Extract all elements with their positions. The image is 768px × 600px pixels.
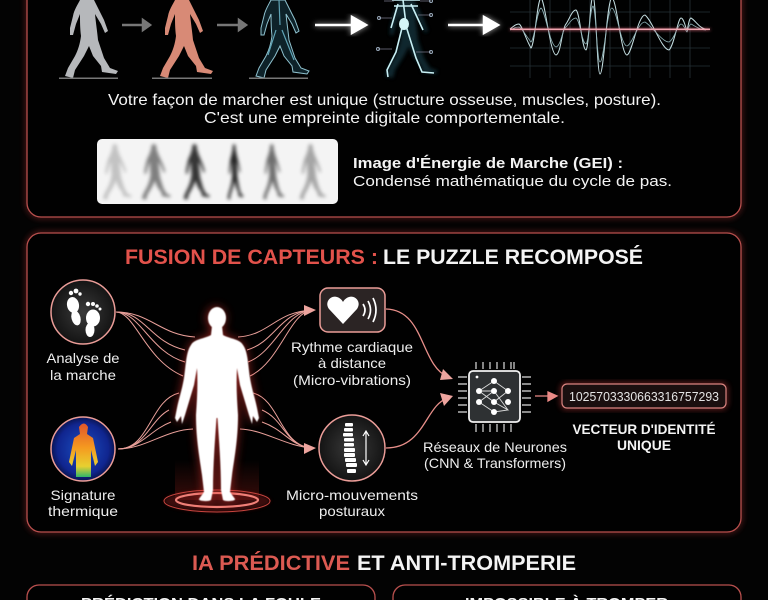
panel: crowd prediction <box>27 585 375 600</box>
label: thermal signature: thermique <box>48 503 118 519</box>
text: gait description <box>108 92 661 127</box>
text: gait description: Votre façon de marcher est unique (structure osseuse, muscles, posture). <box>108 92 661 109</box>
heading: predictive AI <box>192 552 576 575</box>
chart: gait waveform <box>510 0 710 78</box>
text: GEI caption: Condensé mathématique du cycle de pas. <box>353 173 672 190</box>
connectors: sensors to body <box>116 310 312 449</box>
connector: spine sensor to neural network <box>386 393 453 448</box>
icon: glowing human body on scanner <box>164 307 270 512</box>
identity vector box <box>562 384 726 408</box>
label: unique identity vector <box>572 421 716 453</box>
heading: predictive AI: IA PRÉDICTIVE <box>192 552 350 575</box>
label: remote heart rate: à distance <box>318 355 386 371</box>
heading: sensor fusion: FUSION DE CAPTEURS : <box>125 246 378 269</box>
icon: neural network chip <box>458 362 531 432</box>
icon: muscle walking figure <box>152 0 213 79</box>
label: remote heart rate: (Micro-vibrations) <box>293 372 411 388</box>
label: postural micro-movements: Micro-mouvements <box>286 487 418 503</box>
arrow: into heart sensor <box>304 305 316 316</box>
icon: spine micro-movements <box>319 415 385 481</box>
label: unique identity vector: VECTEUR D'IDENTITÉ <box>572 421 716 437</box>
label: postural micro-movements: posturaux <box>319 503 385 519</box>
heading: sensor fusion: LE PUZZLE RECOMPOSÉ <box>383 246 643 269</box>
panel: impossible to deceive <box>393 585 741 600</box>
label: remote heart rate <box>291 339 413 388</box>
heading: predictive AI: ET ANTI-TROMPERIE <box>357 552 576 575</box>
arrow: grey step 2 <box>217 20 246 30</box>
panel: sensor fusion <box>27 233 741 532</box>
icon: skeleton walking figure <box>376 0 438 78</box>
arrow: white glowing step 3 <box>315 17 366 33</box>
label: thermal signature: Signature <box>50 487 116 503</box>
label: unique identity vector: UNIQUE <box>617 437 671 453</box>
connector: heart sensor to neural network <box>386 309 453 380</box>
label: remote heart rate: Rythme cardiaque <box>291 339 413 355</box>
text: GEI caption: Image d'Énergie de Marche (GEI) : <box>353 155 623 172</box>
arrow: grey step 1 <box>122 20 150 30</box>
arrow: network to vector <box>535 392 557 401</box>
heading: sensor fusion <box>125 246 643 269</box>
label: gait analysis: la marche <box>50 367 116 383</box>
icon: thermal signature <box>51 417 115 481</box>
icon: footprints <box>51 280 115 344</box>
icon: grey walking figure <box>59 0 118 79</box>
label: postural micro-movements <box>286 487 418 519</box>
label: neural networks <box>423 439 567 471</box>
label: neural networks: (CNN & Transformers) <box>424 455 566 471</box>
label: neural networks: Réseaux de Neurones <box>423 439 567 455</box>
identity vector box: 1025703330663316757293 <box>569 389 719 404</box>
label: gait analysis <box>46 350 120 383</box>
icon: vascular walking figure <box>249 0 309 79</box>
label: thermal signature <box>48 487 118 519</box>
label: gait analysis: Analyse de <box>46 350 120 366</box>
image: gait energy image <box>97 139 338 204</box>
text: gait description: C'est une empreinte digitale comportementale. <box>204 110 565 127</box>
panel: gait signature <box>27 0 741 217</box>
icon: heart with waves <box>320 288 385 332</box>
arrow: white glowing step 4 <box>448 17 498 33</box>
arrow: into spine sensor <box>304 443 316 454</box>
text: GEI caption <box>353 155 672 190</box>
